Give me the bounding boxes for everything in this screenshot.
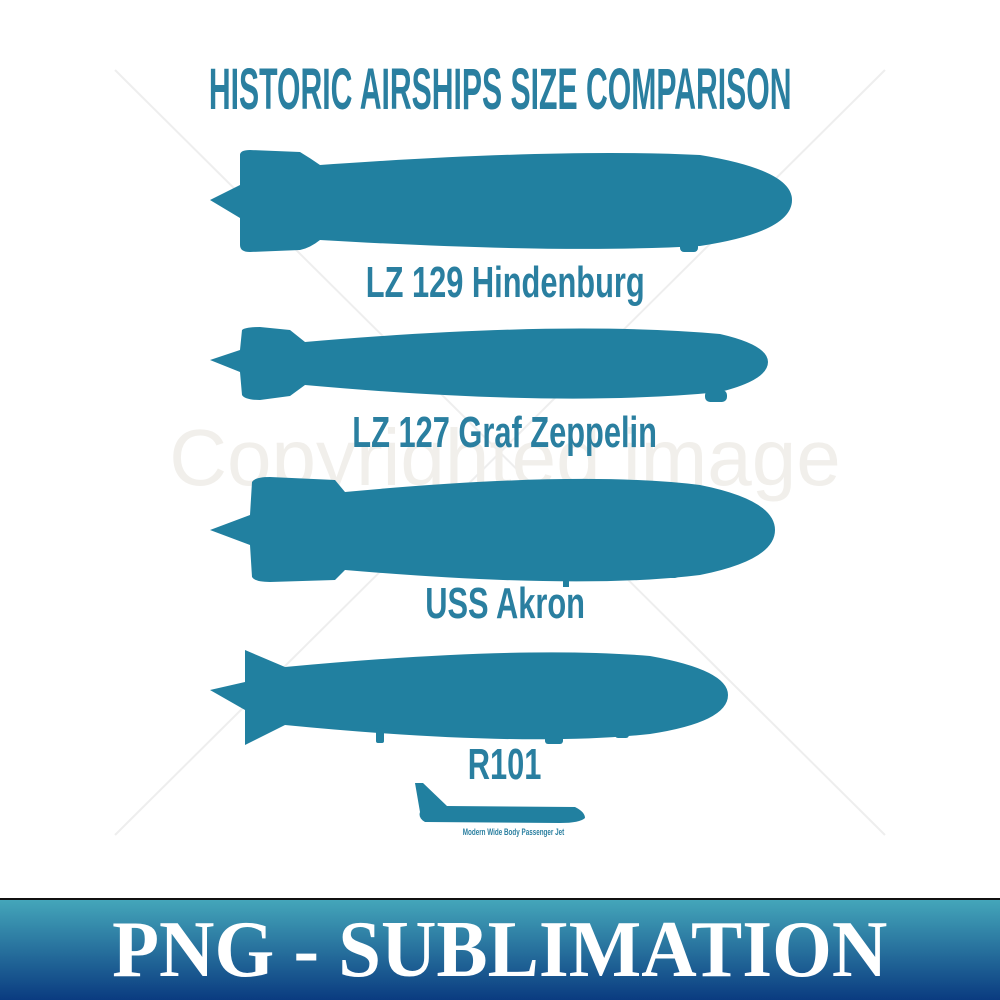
label: Graf Zeppelin: LZ 127 Graf Zeppelin — [353, 408, 657, 457]
banner — [0, 898, 1000, 1000]
airship: USS Akron — [210, 477, 775, 587]
airship: R101 — [210, 650, 728, 745]
title: HISTORIC AIRSHIPS SIZE COMPARISON — [209, 57, 791, 122]
label: R101: R101 — [468, 740, 542, 789]
airship: Graf Zeppelin — [210, 327, 768, 402]
label: Hindenburg: LZ 129 Hindenburg — [366, 258, 644, 307]
label: USS Akron: USS Akron — [425, 579, 585, 628]
banner text: PNG - SUBLIMATION — [112, 906, 888, 994]
label: jet: Modern Wide Body Passenger Jet — [462, 827, 564, 837]
airship: Hindenburg — [210, 150, 792, 252]
icon: passenger jet — [415, 783, 585, 823]
watermark: Copyrighted image — [169, 413, 841, 502]
